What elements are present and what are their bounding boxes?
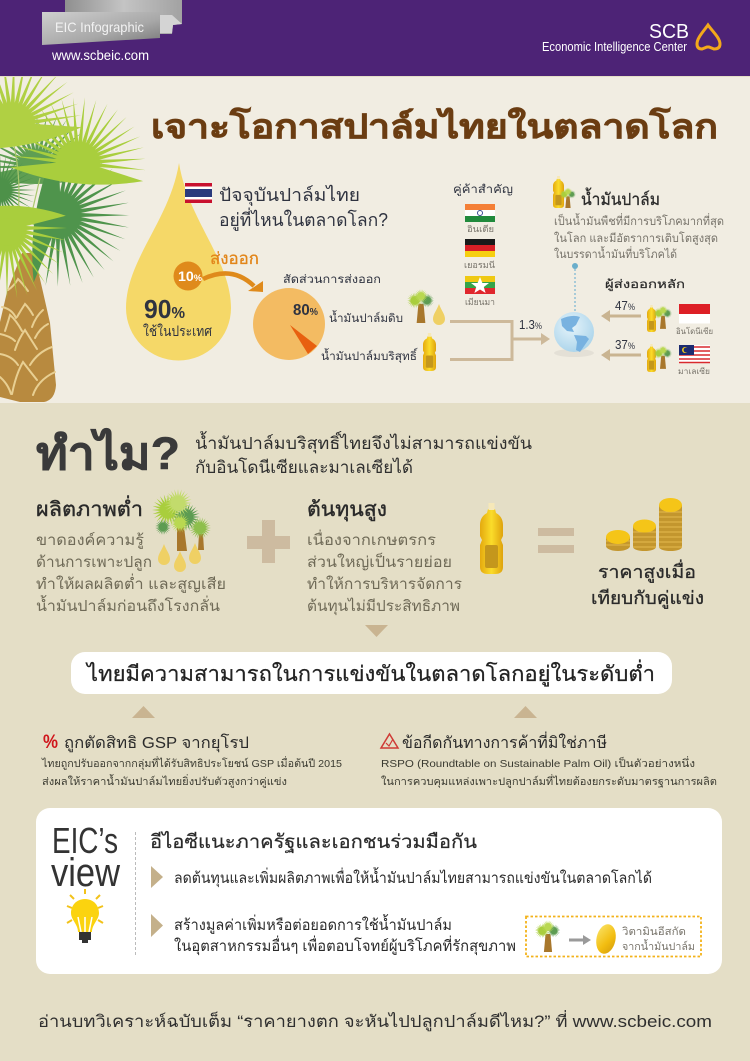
panel: GSP removal <box>41 732 342 788</box>
result text <box>591 559 704 609</box>
icon: bottle and palm <box>553 176 576 208</box>
90 percent domestic use: 90% <box>144 294 185 324</box>
arrow: up triangle right <box>514 706 537 718</box>
chart: export share pie <box>253 288 325 360</box>
heading: key partners: คู่ค้าสำคัญ <box>453 183 513 196</box>
SCB wordmark: SCB <box>649 21 689 43</box>
label: India: อินเดีย <box>467 224 494 234</box>
panel: non-tariff barriers <box>381 731 717 788</box>
ribbon badge <box>42 0 182 45</box>
label: Myanmar: เมียนมา <box>465 297 495 307</box>
panel: high cost <box>307 499 503 616</box>
low productivity text: น้ำมันปาล์มก่อนถึงโรงกลั่น <box>36 595 220 615</box>
flag: India <box>465 204 495 222</box>
exporter: Malaysia: 37% <box>615 337 635 352</box>
panel: low productivity <box>36 489 226 615</box>
90 percent domestic use <box>143 294 212 339</box>
callout: vitamin E <box>526 916 701 956</box>
icon: warning triangle <box>381 734 398 748</box>
page background: lower section <box>0 403 750 1061</box>
heading: why: ทำไม? <box>36 427 180 479</box>
arrow: up triangle left <box>132 706 155 718</box>
palm oil description <box>554 213 724 261</box>
title: เจาะโอกาสปาล์มไทยในตลาดโลก <box>151 107 718 145</box>
heading: where is Thai palm: อยู่ที่ไหนในตลาดโลก? <box>219 207 388 231</box>
label: crude palm oil: น้ำมันปาล์มดิบ <box>329 310 403 325</box>
panel: high price result <box>591 498 704 609</box>
heading: where is Thai palm <box>219 184 388 231</box>
bullet two <box>151 914 516 956</box>
icon: percent: % <box>43 732 58 753</box>
icon: equals <box>538 528 574 553</box>
exporter: Malaysia: มาเลเซีย <box>678 367 710 376</box>
flag: Myanmar <box>465 276 495 294</box>
EIC's view wordmark <box>51 820 120 895</box>
dotted leader <box>572 263 578 313</box>
bullet two: ในอุตสาหกรรมอื่นๆ เพื่อตอบโจทย์ผู้บริโภคที่รักสุขภาพ <box>174 935 516 956</box>
icon: light bulb <box>67 889 103 943</box>
panel: palm oil facts <box>553 176 724 376</box>
low productivity text: ขาดองค์ความรู้ <box>36 532 144 549</box>
illustration: palm tree <box>0 77 145 402</box>
icon: refined oil bottle <box>423 333 436 371</box>
icon: plus <box>247 520 290 563</box>
icon: coin stacks <box>606 498 682 551</box>
callout: vitamin E: วิตามินอีสกัด <box>622 925 686 938</box>
flag: Germany <box>465 239 495 257</box>
badge: 10 percent <box>174 262 202 290</box>
high cost text: ทำให้การบริหารจัดการ <box>307 575 462 593</box>
label: Germany: เยอรมนี <box>464 260 495 270</box>
SCB wordmark: Economic Intelligence Center <box>542 39 688 54</box>
pie title: สัดส่วนการส่งออก <box>283 274 381 286</box>
connector arrow to world <box>450 322 550 360</box>
SCB wordmark <box>542 21 689 54</box>
icon: Thai flag <box>185 183 212 203</box>
arrow: export <box>203 273 263 292</box>
callout: vitamin E: จากน้ำมันปาล์ม <box>622 939 695 953</box>
label: refined palm oil: น้ำมันปาล์มบริสุทธิ์ <box>321 347 419 363</box>
90 percent domestic use: ใช้ในประเทศ <box>143 323 212 339</box>
high cost text <box>307 529 462 616</box>
icon: crude palm and drop <box>407 289 445 325</box>
icon: globe <box>554 312 594 357</box>
heading: public private: อีไอซีแนะภาครัฐและเอกชนร่วมมือกัน <box>150 831 477 853</box>
heading: barriers: ข้อกีดกันทางการค้าที่มิใช่ภาษี <box>402 731 607 752</box>
heading: palm oil: น้ำมันปาล์ม <box>581 187 660 209</box>
high cost text: ส่วนใหญ่เป็นรายย่อย <box>307 552 452 571</box>
why subheading: กับอินโดนีเซียและมาเลเซียได้ <box>195 457 413 477</box>
why subheading <box>195 431 532 477</box>
barriers text: RSPO (Roundtable on Sustainable Palm Oil) เป็นตัวอย่างหนึ่ง <box>381 756 695 770</box>
barriers text <box>381 756 717 788</box>
callout: low competitiveness <box>71 652 672 694</box>
heading: main exporters: ผู้ส่งออกหลัก <box>605 278 685 291</box>
icon: large oil drop <box>126 163 231 360</box>
heading: high cost: ต้นทุนสูง <box>307 499 387 522</box>
panel: key trading partners <box>453 183 513 307</box>
page background: upper section <box>0 77 750 403</box>
result text: เทียบกับคู่แข่ง <box>591 588 704 609</box>
panel: header banner <box>0 0 750 76</box>
GSP text <box>41 756 342 788</box>
EIC's view wordmark: EIC’s <box>52 820 118 861</box>
palm oil description: ในโลก และมีอัตราการเติบโตสูงสุด <box>554 231 718 245</box>
bullet one: ลดต้นทุนและเพิ่มผลิตภาพเพื่อให้น้ำมันปาล์มไทยสามารถแข่งขันในตลาดโลกได้ <box>174 867 652 888</box>
exporter: Indonesia <box>601 298 713 336</box>
value: 1.3 percent: 1.3% <box>519 317 542 332</box>
website link: www.scbeic.com <box>51 47 149 63</box>
panel: EIC's view <box>36 808 722 974</box>
result text: ราคาสูงเมื่อ <box>598 559 696 583</box>
heading: low productivity: ผลิตภาพต่ำ <box>36 495 143 521</box>
palm oil description: ในบรรดาน้ำมันที่บริโภคได้ <box>554 246 677 261</box>
chart: export share pie: 80% <box>293 302 318 319</box>
badge: 10 percent: 10% <box>178 268 202 284</box>
ribbon badge: EIC Infographic <box>55 19 144 35</box>
footer call to action: อ่านบทวิเคราะห์ฉบับเต็ม “ราคายางตก จะหันไปปลูกปาล์มดีไหม?” ที่ www.scbeic.com <box>38 1010 712 1032</box>
exporter: Malaysia <box>601 337 710 376</box>
GSP text: ไทยถูกปรับออกจากกลุ่มที่ได้รับสิทธิประโยชน์ GSP เมื่อต้นปี 2015 <box>41 756 342 770</box>
heading: where is Thai palm: ปัจจุบันปาล์มไทย <box>219 184 360 206</box>
arrow: down triangle <box>365 625 388 637</box>
panel: Thai palm oil split <box>126 163 550 371</box>
high cost text: เนื่องจากเกษตรกร <box>307 529 436 549</box>
exporter: Indonesia: 47% <box>615 298 635 313</box>
low productivity text: ด้านการเพาะปลูก <box>36 554 152 571</box>
icon: oil bottle <box>480 503 503 574</box>
bullet two: สร้างมูลค่าเพิ่มหรือต่อยอดการใช้น้ำมันปาล์ม <box>174 914 452 934</box>
heading: GSP: ถูกตัดสิทธิ GSP จากยุโรป <box>64 733 249 753</box>
high cost text: ต้นทุนไม่มีประสิทธิภาพ <box>307 597 460 616</box>
low productivity text: ทำให้ผลผลิตต่ำ และสูญเสีย <box>36 573 226 593</box>
icon: palm trees with drops <box>152 489 211 572</box>
palm oil description: เป็นน้ำมันพืชที่มีการบริโภคมากที่สุด <box>554 213 724 228</box>
low productivity text <box>36 532 226 615</box>
exporter: Indonesia: อินโดนีเซีย <box>676 326 713 336</box>
GSP text: ส่งผลให้ราคาน้ำมันปาล์มไทยยิ่งปรับตัวสูงกว่าคู่แข่ง <box>42 774 287 788</box>
why subheading: น้ำมันปาล์มบริสุทธิ์ไทยจึงไม่สามารถแข่งขัน <box>195 431 532 454</box>
callout: low competitiveness: ไทยมีความสามารถในการแข่งขันในตลาดโลกอยู่ในระดับต่ำ <box>85 659 655 687</box>
barriers text: ในการควบคุมแหล่งเพาะปลูกปาล์มที่ไทยต้องยกระดับมาตรฐานการผลิต <box>381 774 717 788</box>
EIC's view wordmark: view <box>51 851 120 895</box>
icon: SCB logo <box>697 25 720 49</box>
export label: ส่งออก <box>210 250 259 268</box>
